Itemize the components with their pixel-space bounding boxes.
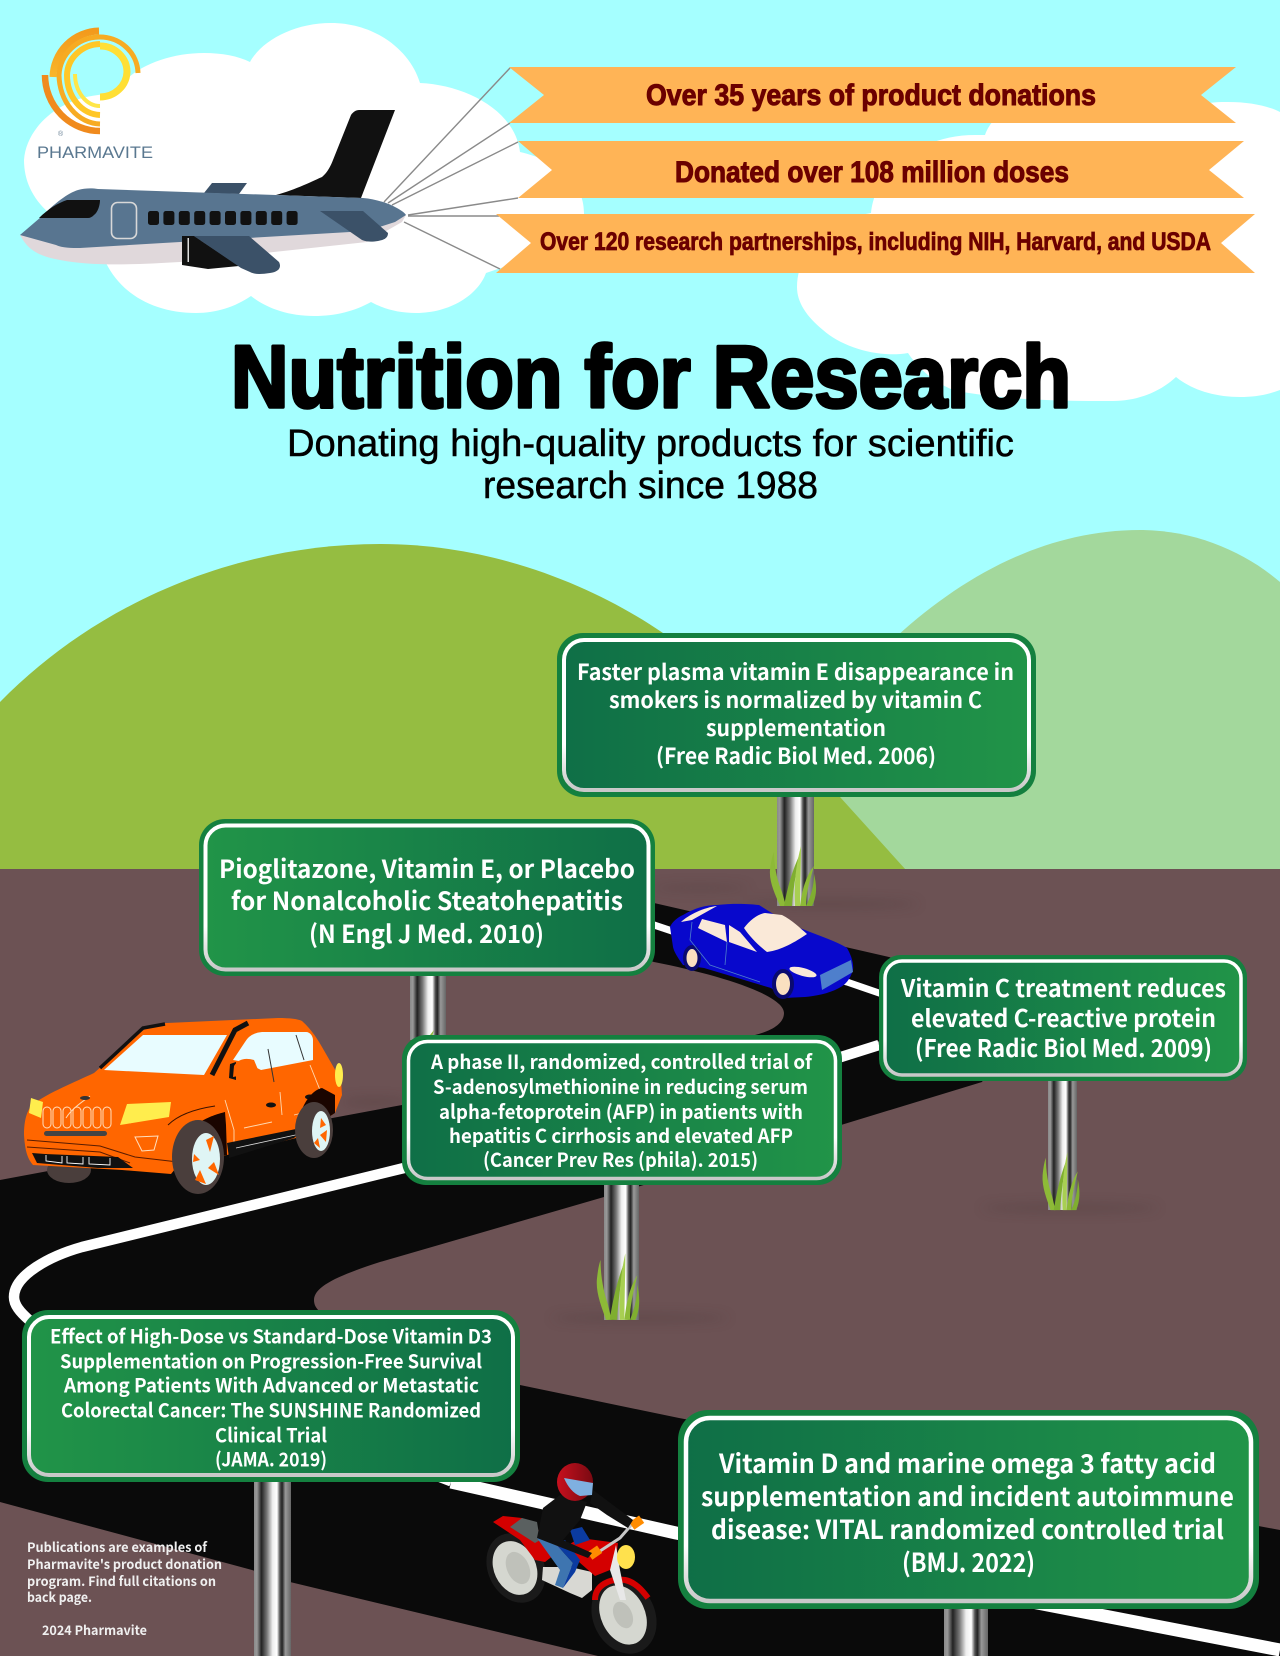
sign: SUNSHINE trial: (JAMA. 2019) — [215, 1444, 327, 1473]
orange SUV — [24, 1018, 343, 1194]
subtitle: research since 1988 — [483, 465, 818, 507]
sign: pioglitazone: Pioglitazone, Vitamin E, or Placebo — [219, 850, 635, 886]
sign: vitamin C and CRP — [879, 955, 1247, 1081]
subtitle — [287, 423, 1014, 507]
sign: SAMe phase II: hepatitis C cirrhosis and elevated AFP — [449, 1120, 793, 1149]
motorcycle with rider — [475, 1463, 669, 1656]
sign: SAMe phase II: A phase II, randomized, controlled trial of — [430, 1046, 813, 1075]
pole: sign 2 — [410, 970, 446, 1040]
sign: pioglitazone: for Nonalcoholic Steatohepatitis — [231, 882, 623, 918]
banner: 35 years: Over 35 years of product donations — [646, 79, 1096, 112]
right cloud — [797, 90, 1280, 401]
green hill — [0, 544, 906, 870]
sign: vitamin C and CRP: elevated C-reactive protein — [911, 999, 1216, 1034]
sign: SUNSHINE trial: Among Patients With Advanced or Metastatic — [63, 1370, 479, 1399]
pole: sign 1 — [777, 790, 814, 906]
footnote: publications note — [27, 1537, 222, 1606]
light green hill — [820, 530, 1280, 870]
logo: Pharmavite: ® — [58, 130, 64, 138]
banner: 108 million doses — [518, 141, 1244, 198]
banner: 108 million doses: Donated over 108 million doses — [675, 156, 1069, 189]
sign: SAMe phase II: S-adenosylmethionine in reducing serum — [433, 1071, 808, 1100]
sign: SUNSHINE trial: Supplementation on Progression-Free Survival — [60, 1346, 482, 1375]
footnote: publications note: Publications are examples of — [27, 1537, 208, 1556]
sign: SUNSHINE trial: Clinical Trial — [215, 1420, 327, 1449]
banner: 35 years — [509, 67, 1236, 123]
footnote: publications note: program. Find full citations on — [27, 1571, 216, 1590]
blue car — [670, 904, 853, 999]
sign: VITAL trial — [678, 1410, 1259, 1609]
pole: sign 6 — [944, 1604, 988, 1656]
sign: vitamin C and CRP: (Free Radic Biol Med. 2009) — [915, 1029, 1212, 1064]
grass: sign 3 — [1043, 1152, 1079, 1210]
logo: Pharmavite — [37, 31, 153, 162]
sign: pioglitazone: (N Engl J Med. 2010) — [309, 915, 544, 951]
logo: Pharmavite: PHARMAVITE — [37, 144, 153, 162]
ground — [0, 869, 1280, 1656]
grass tip: sign 2 — [426, 1030, 434, 1040]
sign: VITAL trial: (BMJ. 2022) — [902, 1543, 1035, 1580]
connector lines from plane to banners — [384, 68, 518, 269]
sign: VITAL trial: Vitamin D and marine omega 3 fatty acid — [718, 1444, 1216, 1481]
sign: SAMe phase II: (Cancer Prev Res (phila). 2015) — [483, 1144, 758, 1173]
sign: SUNSHINE trial: Effect of High-Dose vs Standard-Dose Vitamin D3 — [50, 1321, 492, 1350]
road centre line — [14, 922, 1280, 1650]
airplane — [20, 110, 406, 274]
road — [0, 898, 1280, 1656]
sign: vitamin E in smokers: (Free Radic Biol Med. 2006) — [656, 739, 936, 771]
sign: SUNSHINE trial: Colorectal Cancer: The SUNSHINE Randomized — [61, 1395, 481, 1424]
sign: vitamin E in smokers — [557, 633, 1036, 797]
sign: vitamin E in smokers: Faster plasma vitamin E disappearance in — [577, 655, 1014, 687]
sign: vitamin E in smokers: smokers is normalized by vitamin C — [609, 683, 982, 715]
sign: SAMe phase II: alpha-fetoprotein (AFP) in patients with — [439, 1096, 803, 1125]
footnote: publications note: back page. — [27, 1587, 92, 1606]
sign: SUNSHINE trial — [22, 1310, 520, 1482]
banner: research partnerships — [496, 214, 1255, 273]
footnote: publications note: Pharmavite's product donation — [27, 1554, 222, 1573]
left cloud — [24, 23, 584, 316]
footnote: copyright year: 2024 Pharmavite — [42, 1620, 147, 1639]
title: Nutrition for Research — [231, 327, 1071, 426]
sign: vitamin C and CRP: Vitamin C treatment reduces — [900, 969, 1226, 1004]
grass: sign 4 — [597, 1253, 639, 1320]
ground shadows — [340, 885, 1160, 1322]
sign: vitamin E in smokers: supplementation — [706, 711, 886, 743]
pole: sign 4 — [604, 1180, 639, 1320]
sign: VITAL trial: disease: VITAL randomized controlled trial — [711, 1510, 1224, 1547]
grass: sign 1 — [770, 846, 816, 906]
sign: pioglitazone — [199, 819, 655, 976]
subtitle: Donating high-quality products for scientific — [287, 423, 1014, 465]
pole: sign 5 — [254, 1478, 291, 1656]
sign: VITAL trial: supplementation and incident autoimmune — [701, 1477, 1234, 1514]
pole: sign 3 — [1048, 1078, 1077, 1210]
sign: SAMe phase II — [402, 1035, 842, 1185]
